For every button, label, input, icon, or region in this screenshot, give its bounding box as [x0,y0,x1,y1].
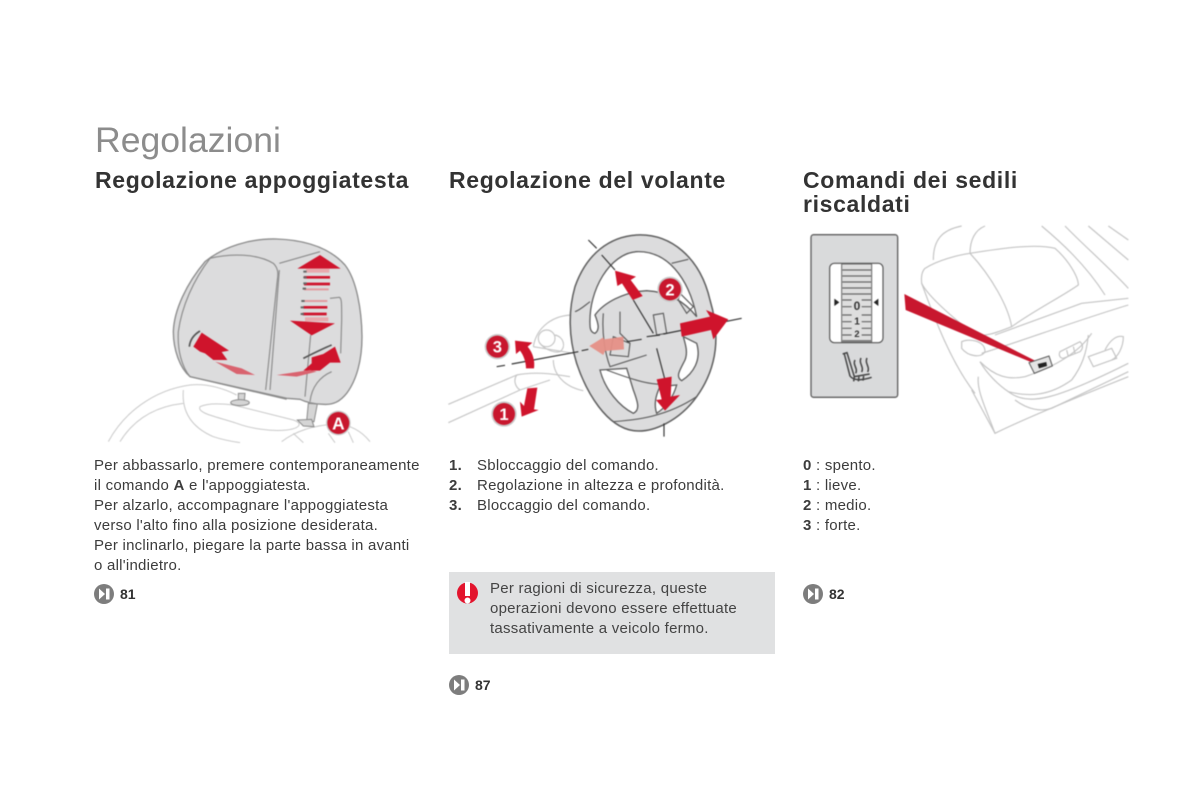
title: Regolazioni [95,120,281,160]
reference: page 87 [449,675,491,695]
illustration: headrest [108,238,370,444]
badge A: A [332,413,345,433]
text: headrest instructions: il comando A e l'appoggiatesta. [94,477,311,494]
control panel [811,235,898,397]
badge 1 [491,401,517,427]
text: headrest instructions: Per alzarlo, accompagnare l'appoggiatesta [94,497,388,514]
control panel: 1 [854,317,860,328]
arrow 1 [520,388,539,417]
thumbwheel [830,263,883,343]
control panel: 0 [854,299,861,313]
seat back outline [108,385,370,443]
reference: page 82 [803,584,845,604]
text: steering wheel steps: Regolazione in altezza e profondità. [477,477,724,494]
text: steering wheel steps: Sbloccaggio del comando. [477,457,659,474]
arrow 2 down [656,377,680,411]
callout: safety warning [449,572,775,654]
reference: page 82: 82 [829,586,845,602]
text: steering wheel steps: Bloccaggio del comando. [477,497,650,514]
arrow 2 right [680,310,728,339]
badge 1: 1 [499,405,509,424]
text: heat levels [803,457,876,534]
heading: headrest: Regolazione appoggiatesta [95,167,409,193]
heated seat symbol [843,353,872,381]
centre lines [497,240,742,437]
icon: warning [457,582,478,604]
wheel details [575,259,697,422]
heading: heated seats: Comandi dei sedili [803,167,1018,193]
reference: page 81: 81 [120,586,136,602]
reference: page 87: 87 [475,677,491,693]
steering column [448,315,583,423]
arrow: tilt left [189,331,255,375]
illustration: heated seat control [810,225,1129,434]
arrow 2 back [589,337,624,355]
badge 3 [485,334,510,359]
wheel rim [570,235,716,431]
text: heat levels: 0 : spento. [803,457,876,474]
control panel: 2 [854,329,860,339]
text: steering wheel steps: 3. [449,497,462,514]
seat line drawing [921,226,1128,433]
text: steering wheel steps [449,457,724,514]
text: steering wheel steps: 1. [449,457,462,474]
heading: heated seats: riscaldati [803,191,910,217]
heading: heated seats [803,167,1018,217]
warning text: tassativamente a veicolo fermo. [490,620,709,637]
text: steering wheel steps: 2. [449,477,462,494]
arrow: up and down [290,255,341,335]
arrow: tilt right [277,345,341,377]
badge 2 [657,277,683,302]
text: headrest instructions [94,457,420,574]
wheel openings [590,252,698,413]
text: headrest instructions: o all'indietro. [94,557,182,574]
arrow 2 up [615,271,643,300]
text: headrest instructions: verso l'alto fino alla posizione desiderata. [94,517,378,534]
warning text: operazioni devono essere effettuate [490,600,737,617]
heading: steering wheel: Regolazione del volante [449,167,726,193]
warning text [490,580,737,637]
red pointer [904,294,1035,363]
text: heat levels: 1 : lieve. [803,477,861,494]
arrow 3 [515,341,534,368]
reference: page 81 [94,584,136,604]
headrest body [173,239,362,404]
badge 2: 2 [665,280,675,299]
badge 3: 3 [493,338,502,357]
headrest details [178,252,342,402]
text: heat levels: 2 : medio. [803,497,871,514]
badge A [326,411,351,435]
text: headrest instructions: Per inclinarlo, piegare la parte bassa in avanti [94,537,410,554]
posts [231,393,317,427]
text: headrest instructions: Per abbassarlo, premere contemporaneamente [94,457,420,474]
illustration: steering wheel [448,233,742,438]
text: heat levels: 3 : forte. [803,517,861,534]
seat switch [1029,356,1052,373]
warning text: Per ragioni di sicurezza, queste [490,580,707,597]
